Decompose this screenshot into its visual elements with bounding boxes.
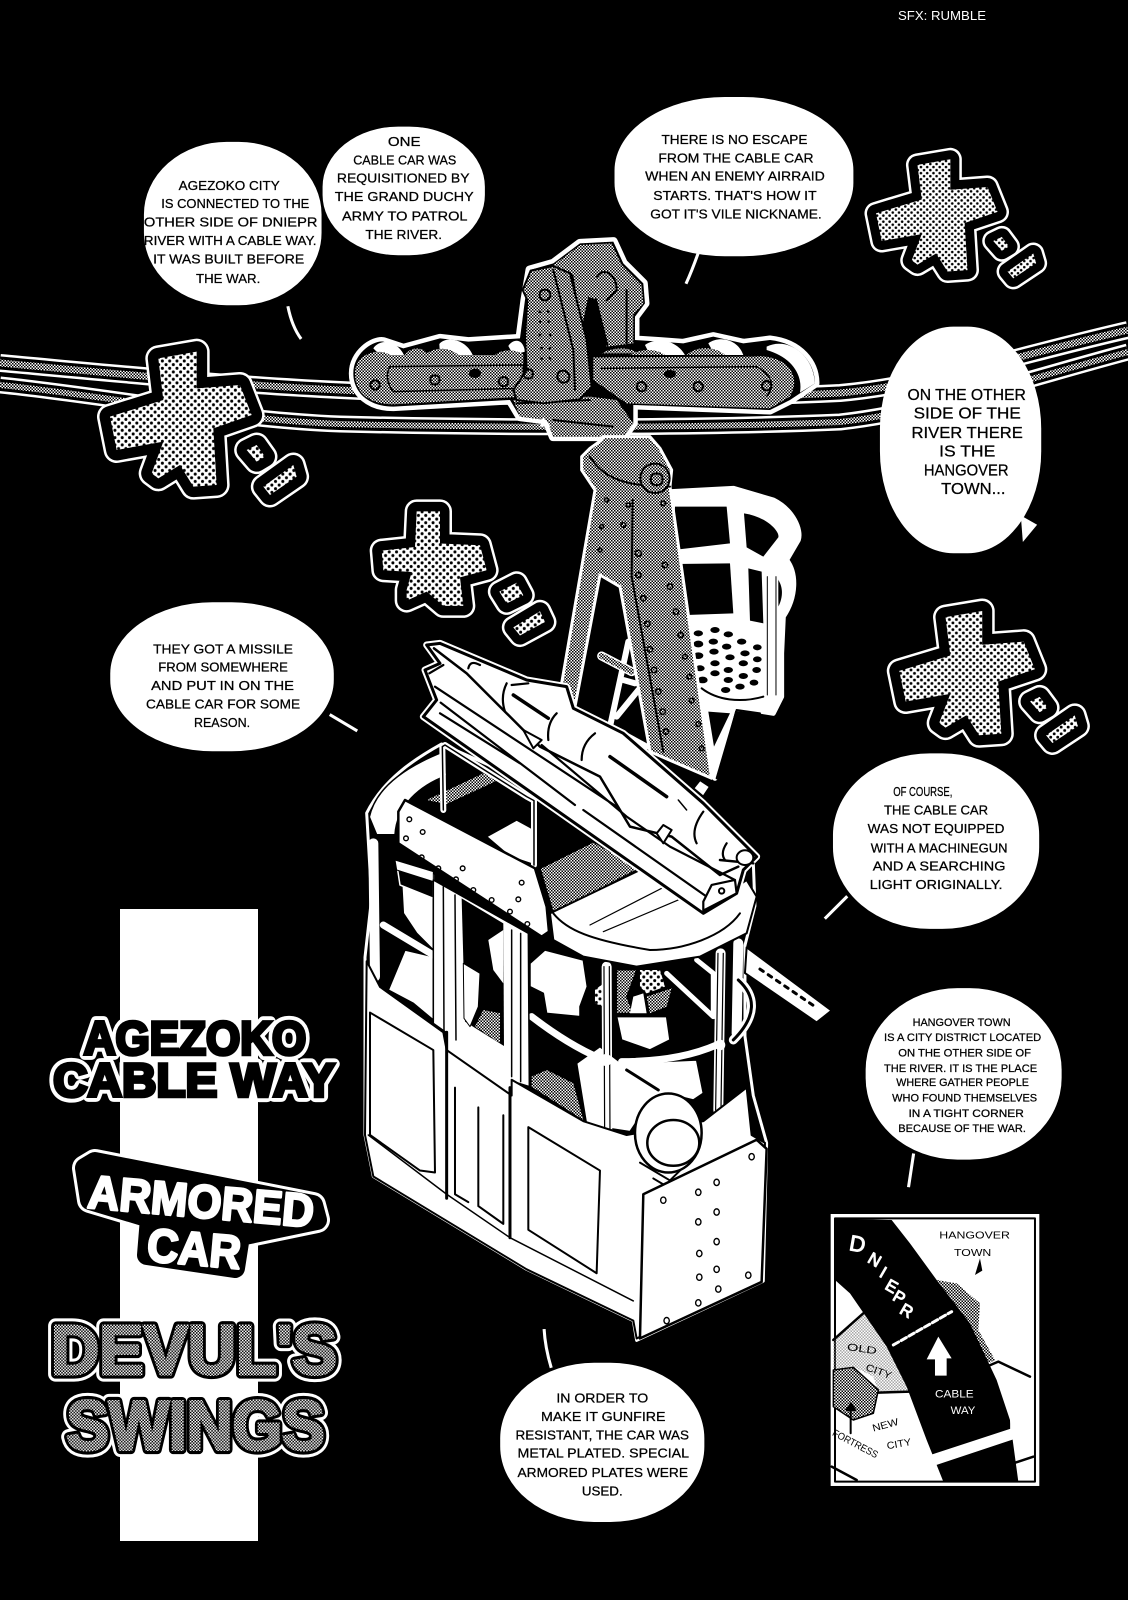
speech balloon: Agezoko City: THE WAR. bbox=[196, 271, 260, 286]
title: Devil's Swings: DEVUL'S bbox=[51, 1311, 337, 1389]
map: labels: D bbox=[847, 1230, 867, 1258]
map: labels bbox=[847, 1230, 975, 1417]
perforated seat ovals bbox=[693, 627, 762, 693]
title: Agezoko Cable Way: AGEZOKO bbox=[84, 1011, 306, 1064]
speech balloon: no escape: FROM THE CABLE CAR bbox=[658, 150, 814, 165]
cage tubes bbox=[672, 488, 799, 778]
map of the Dniepr river bbox=[830, 1214, 1039, 1486]
speech balloon: missile: THEY GOT A MISSILE bbox=[153, 641, 293, 656]
arm rivets bbox=[598, 498, 704, 751]
speech balloon: no escape: STARTS. THAT'S HOW IT bbox=[653, 188, 817, 203]
rear mechanism bbox=[553, 243, 643, 347]
rumble splash right bbox=[899, 611, 1078, 743]
title: Devil's Swings: SWINGS bbox=[66, 1387, 325, 1465]
roof and shield bbox=[398, 800, 757, 967]
speech balloon: other side of the river: SIDE OF THE bbox=[914, 406, 1021, 423]
speech balloon: other side of the river: RIVER THERE bbox=[912, 425, 1023, 442]
speech balloon: Hangover Town description: HANGOVER TOWN bbox=[913, 1017, 1011, 1029]
launcher rail lines bbox=[429, 665, 735, 897]
title: Agezoko Cable Way: CABLE WAY bbox=[53, 1053, 335, 1106]
speech balloon: metal plated: MAKE IT GUNFIRE bbox=[541, 1409, 666, 1424]
cage joints bbox=[726, 493, 744, 513]
trolley wheels bbox=[373, 339, 815, 393]
speech balloon: Hangover Town description: THE RIVER. IT IS THE PLACE bbox=[884, 1063, 1037, 1075]
rod bbox=[602, 656, 632, 672]
speech balloon: metal plated: USED. bbox=[582, 1483, 623, 1498]
hanger arm bbox=[562, 437, 712, 778]
crew: gunner torso bbox=[577, 1047, 703, 1132]
map: Hangover Town area bbox=[937, 1280, 995, 1366]
map: labels: P bbox=[890, 1286, 909, 1308]
rear roof ring bbox=[369, 752, 447, 835]
speech balloon: Agezoko City: IS CONNECTED TO THE bbox=[161, 196, 309, 211]
lower clamp bbox=[513, 397, 633, 437]
strut triangles bbox=[610, 642, 647, 747]
speech balloon: one cable car: REQUISITIONED BY bbox=[337, 171, 470, 186]
right carriage arm bbox=[593, 356, 794, 408]
speech balloon: of course: OF COURSE, bbox=[893, 784, 952, 799]
title: Armored Car bbox=[85, 1162, 317, 1279]
missile clamps bbox=[523, 730, 710, 843]
speech balloon: Hangover Town description: WHO FOUND THEMSELVES bbox=[892, 1092, 1037, 1104]
map: old city area bbox=[833, 1313, 910, 1393]
interior with crew bbox=[373, 843, 751, 1133]
speech balloon: no escape: THERE IS NO ESCAPE bbox=[661, 132, 808, 147]
title: Devil's Swings: DEVUL'S bbox=[51, 1311, 337, 1389]
speech balloon: no escape bbox=[615, 97, 853, 284]
riveted shield plate bbox=[398, 800, 549, 937]
speech balloon: Hangover Town description: IS A CITY DISTRICT LOCATED bbox=[884, 1032, 1041, 1044]
gray hatch bbox=[540, 842, 640, 913]
crew: gunner cap bbox=[617, 970, 637, 1013]
speech balloon: Agezoko City: AGEZOKO CITY bbox=[179, 178, 280, 193]
title: Agezoko Cable Way bbox=[53, 1011, 335, 1106]
speech balloon: of course: LIGHT ORIGINALLY. bbox=[870, 877, 1002, 892]
title: Agezoko Cable Way: CABLE WAY bbox=[53, 1053, 335, 1106]
front roof ring bbox=[550, 870, 757, 967]
rumble splash top right bbox=[876, 159, 1036, 278]
title: Devil's Swings: DEVUL'S bbox=[51, 1311, 337, 1389]
missile silhouette bbox=[423, 643, 757, 913]
speech balloon: missile: REASON. bbox=[194, 715, 250, 730]
map: labels: N bbox=[865, 1249, 885, 1271]
map of the Dniepr river: HANGOVER bbox=[939, 1230, 1010, 1241]
crew: left figure bbox=[388, 950, 433, 1020]
speech balloon: of course: WITH A MACHINEGUN bbox=[871, 840, 1008, 855]
map: labels: WAY bbox=[951, 1405, 975, 1417]
speech balloon: of course: THE CABLE CAR bbox=[884, 803, 988, 818]
diagonal strut bbox=[667, 960, 713, 1017]
map: river bbox=[835, 1218, 1018, 1482]
title: Agezoko Cable Way: AGEZOKO bbox=[84, 1011, 306, 1064]
speech balloon: one cable car: CABLE CAR WAS bbox=[353, 152, 456, 167]
illustration: missile on launcher rail bbox=[423, 643, 757, 913]
crew: centre figure bbox=[530, 950, 587, 1017]
cage windows bbox=[673, 507, 782, 747]
speech balloon: missile: AND PUT IN ON THE bbox=[151, 678, 294, 693]
speech balloon: other side of the river: HANGOVER bbox=[924, 463, 1009, 480]
map: arrow bbox=[927, 1337, 952, 1376]
illustration: armored cable car bbox=[365, 744, 832, 1340]
map: labels: R bbox=[897, 1300, 917, 1322]
speech balloon: of course: WAS NOT EQUIPPED bbox=[868, 821, 1004, 836]
map: labels: I bbox=[876, 1263, 890, 1282]
speech balloon: missile: CABLE CAR FOR SOME bbox=[146, 696, 300, 711]
map: labels: CABLE bbox=[935, 1388, 974, 1400]
title: Devil's Swings bbox=[51, 1311, 337, 1465]
rumble splash left bbox=[110, 352, 297, 495]
armor plate right bbox=[640, 1140, 767, 1338]
map of the Dniepr river: CITY bbox=[886, 1437, 912, 1452]
map: labels: E bbox=[882, 1275, 901, 1297]
trolley bumps bbox=[405, 348, 725, 355]
speech balloon: Hangover Town description bbox=[866, 988, 1062, 1187]
searchlight bbox=[635, 1094, 702, 1173]
cable lines bbox=[0, 330, 1128, 427]
title: Devil's Swings: SWINGS bbox=[66, 1387, 325, 1465]
speech balloon: Agezoko City: IT WAS BUILT BEFORE bbox=[153, 251, 304, 266]
speech balloon: Hangover Town description: WHERE GATHER PEOPLE bbox=[896, 1077, 1029, 1089]
white title band bbox=[120, 909, 258, 1541]
map: fortress bbox=[833, 1367, 878, 1420]
map: bridge bbox=[925, 1417, 1017, 1473]
door frame bbox=[433, 880, 529, 1115]
map of the Dniepr river: CITY bbox=[864, 1362, 893, 1382]
missile body lines bbox=[434, 648, 753, 875]
title: Armored Car: CAR bbox=[145, 1218, 243, 1279]
interior bars bbox=[373, 843, 738, 1133]
speech balloon: metal plated: ARMORED PLATES WERE bbox=[518, 1465, 688, 1480]
speech balloon: other side of the river: TOWN... bbox=[941, 481, 1005, 498]
speech balloon: Agezoko City: OTHER SIDE OF DNIEPR bbox=[144, 215, 317, 230]
speech balloon: other side of the river: IS THE bbox=[939, 443, 995, 460]
speech balloon: metal plated: IN ORDER TO bbox=[556, 1391, 648, 1406]
speech balloon: Hangover Town description: BECAUSE OF THE WAR. bbox=[898, 1123, 1026, 1135]
speech balloon: other side of the river: ON THE OTHER bbox=[907, 387, 1026, 404]
map of the Dniepr river: FORTRESS bbox=[830, 1428, 880, 1461]
speech balloon: one cable car bbox=[322, 126, 486, 256]
speech balloon: Hangover Town description: ON THE OTHER SIDE OF bbox=[898, 1048, 1031, 1060]
speech balloon: Hangover Town description: IN A TIGHT CORNER bbox=[909, 1108, 1024, 1120]
missile slots bbox=[513, 695, 667, 797]
rear roof interior bbox=[427, 745, 597, 917]
illustration: seat cage and hanger arm bbox=[562, 437, 799, 778]
speech balloon: no escape: GOT IT'S VILE NICKNAME. bbox=[650, 206, 822, 221]
speech balloon: of course bbox=[825, 753, 1039, 929]
title: Devil's Swings: SWINGS bbox=[66, 1387, 325, 1465]
map of the Dniepr river: NEW bbox=[871, 1417, 900, 1435]
white outline silhouette bbox=[353, 242, 815, 437]
speech balloon: metal plated: METAL PLATED. SPECIAL bbox=[518, 1446, 689, 1461]
speech balloon: Agezoko City: RIVER WITH A CABLE WAY. bbox=[144, 233, 316, 248]
speech balloon: one cable car: ONE bbox=[388, 134, 421, 149]
speech balloon: one cable car: THE RIVER. bbox=[365, 227, 442, 242]
speech balloon: metal plated: RESISTANT, THE CAR WAS bbox=[516, 1427, 689, 1442]
lower body, searchlight and armor bbox=[365, 961, 767, 1338]
rumble splash centre bbox=[382, 511, 545, 636]
speech balloon: missile bbox=[110, 602, 357, 751]
central plate bbox=[513, 266, 592, 403]
title: Armored Car: ARMORED bbox=[86, 1165, 316, 1237]
speech balloon: missile: FROM SOMEWHERE bbox=[158, 660, 288, 675]
sound effect note: SFX: RUMBLE bbox=[898, 8, 986, 23]
car silhouette and rear roof bbox=[365, 744, 832, 1340]
speech balloon: one cable car: ARMY TO PATROL bbox=[342, 208, 468, 223]
gun barrel bbox=[745, 947, 832, 1022]
illustration: trolley carriage on cable bbox=[353, 242, 815, 437]
gray floor bbox=[532, 1070, 583, 1120]
map: dashed cable way bbox=[893, 1312, 952, 1345]
speech balloon: Agezoko City bbox=[143, 141, 323, 339]
map of the Dniepr river: TOWN bbox=[954, 1248, 991, 1259]
speech balloon: no escape: WHEN AN ENEMY AIRRAID bbox=[645, 169, 825, 184]
speech balloon: of course: AND A SEARCHING bbox=[873, 859, 1005, 874]
speech balloon: one cable car: THE GRAND DUCHY bbox=[335, 189, 474, 204]
speech balloon: other side of the river bbox=[880, 327, 1041, 553]
left carriage arm bbox=[355, 352, 523, 404]
map of the Dniepr river: OLD bbox=[846, 1342, 877, 1357]
speech balloon: metal plated bbox=[500, 1329, 704, 1522]
